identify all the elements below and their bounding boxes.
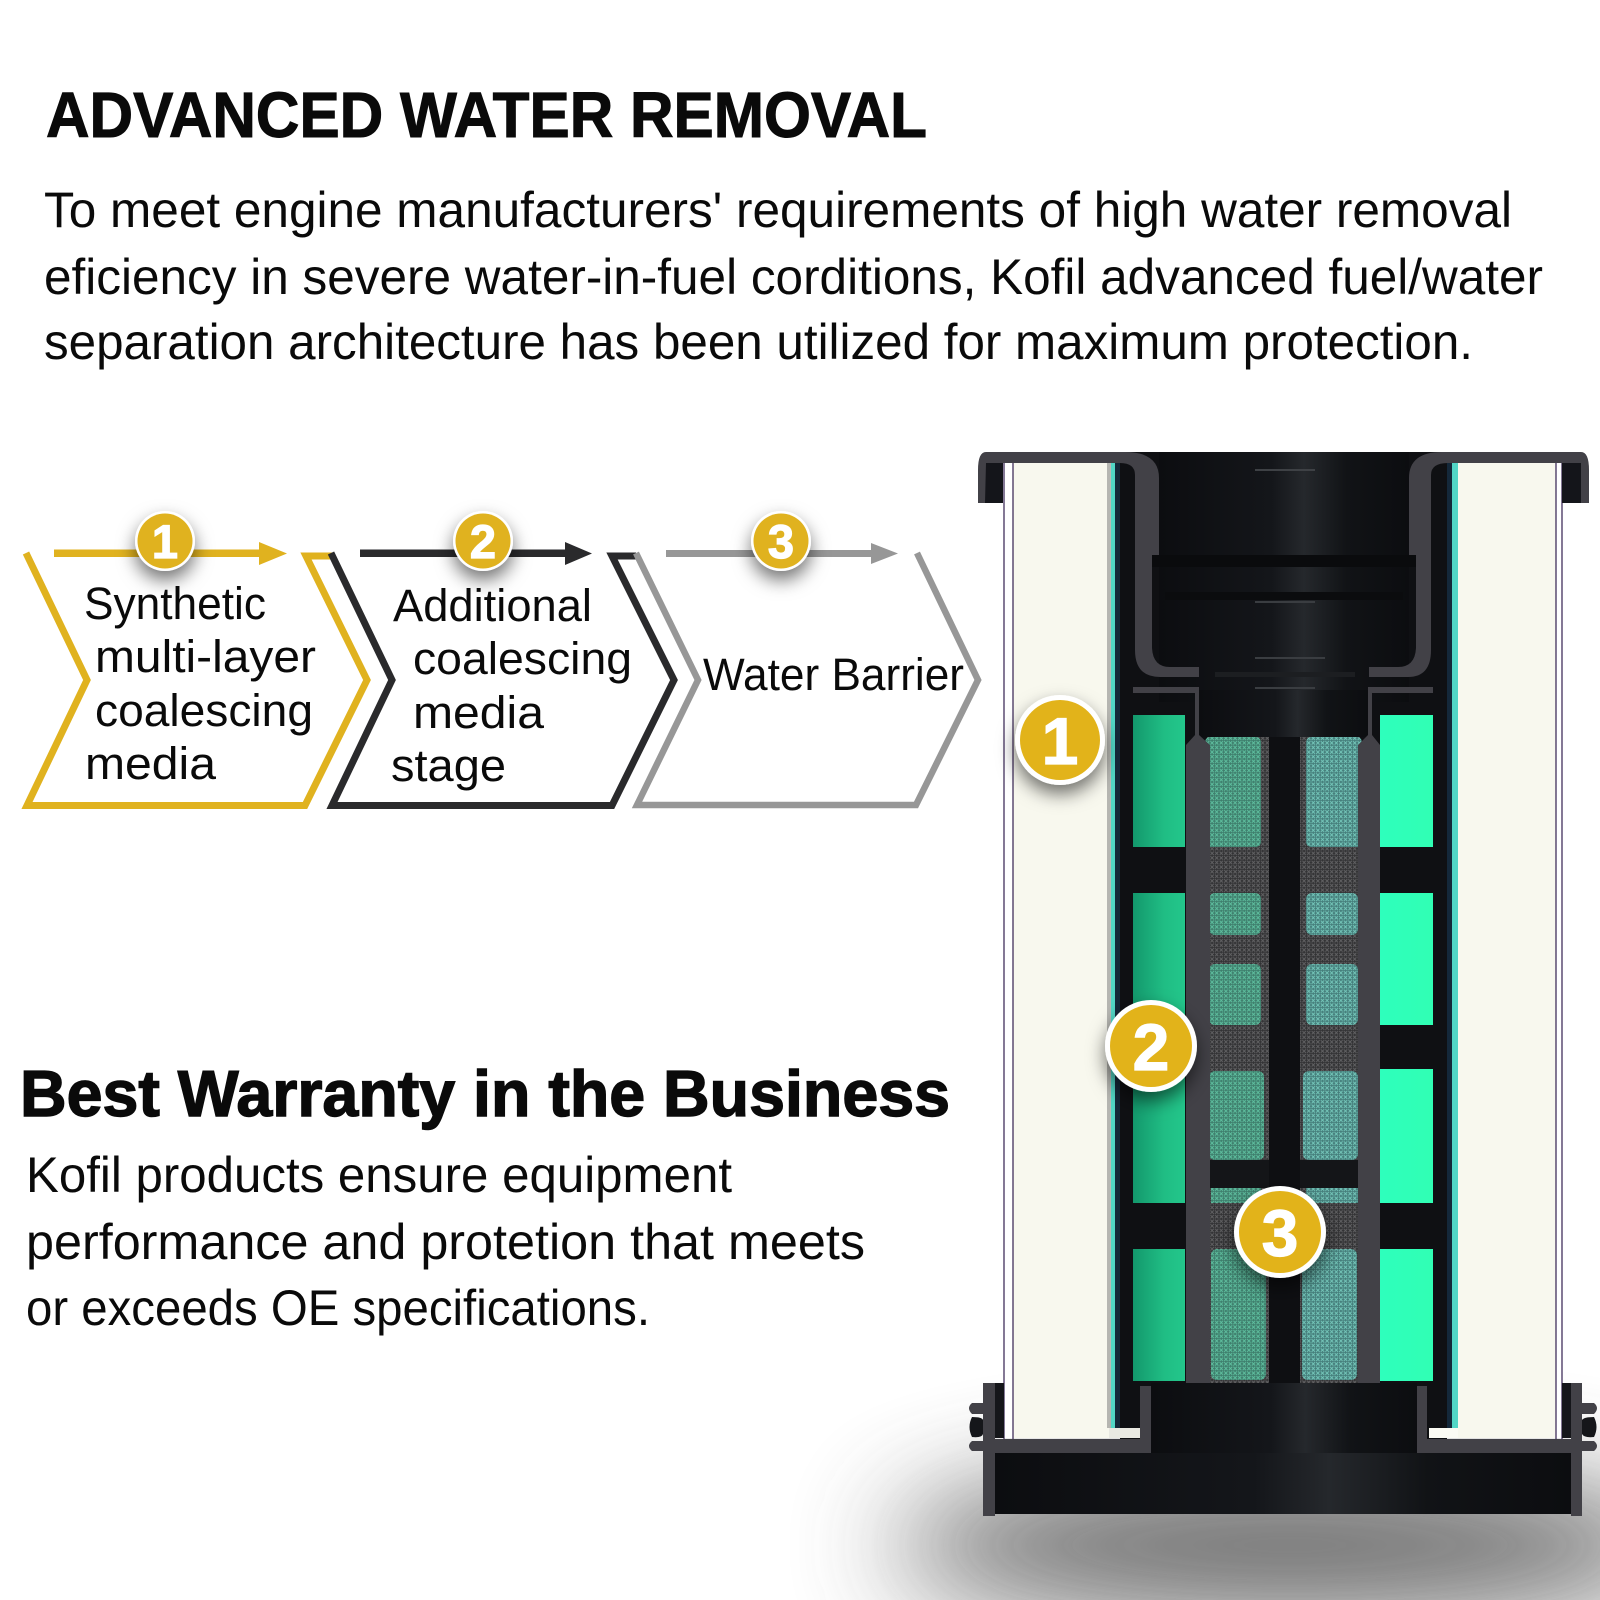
- intro paragraph: eficiency in severe water-in-fuel corditions, Kofil advanced fuel/water: [44, 249, 1543, 305]
- top cap flange left shade: [985, 463, 1003, 503]
- warranty paragraph: [26, 1147, 865, 1336]
- step 1 chevron: synthetic media: [26, 511, 367, 806]
- intro paragraph: To meet engine manufacturers' requirements of high water removal: [44, 182, 1512, 238]
- dark bands over mesh: [1207, 1160, 1360, 1407]
- badge 1 on filter: 1: [1042, 704, 1078, 778]
- step 1 chevron: synthetic media: media: [85, 738, 217, 789]
- badge 2 on filter: 2: [1133, 1010, 1169, 1084]
- outer paper media left: [1004, 463, 1110, 1440]
- base housing left: [969, 1383, 1151, 1516]
- step 2 chevron: additional media: Additional: [393, 580, 592, 631]
- step 2 chevron: additional media: media: [413, 687, 545, 738]
- step 2 chevron: additional media: stage: [391, 740, 506, 791]
- inner black body: [1120, 452, 1447, 1452]
- teal wrap strips: [1107, 463, 1458, 1428]
- step 1 chevron: synthetic media: multi-layer: [95, 631, 316, 682]
- floor shadow: [890, 1475, 1600, 1600]
- central tube wall: [1133, 687, 1433, 1420]
- step 3 chevron: water barrier: Water Barrier: [703, 649, 964, 700]
- green media left: [1133, 715, 1185, 1381]
- step 3 chevron: water barrier: [636, 511, 978, 805]
- bottom white gaps: [1109, 1428, 1458, 1438]
- step 1 chevron: synthetic media: coalescing: [95, 685, 313, 736]
- warranty paragraph: or exceeds OE specifications.: [26, 1280, 650, 1336]
- top cap right: [1369, 452, 1589, 677]
- step 1 chevron: synthetic media: Synthetic: [84, 578, 266, 629]
- water barrier mesh left: [1205, 737, 1266, 1380]
- step 2 chevron: additional media: [331, 511, 674, 806]
- warranty paragraph: performance and protetion that meets: [26, 1214, 865, 1270]
- base block: [995, 1383, 1571, 1514]
- badge 1 on filter: [1015, 695, 1105, 785]
- step 3 chevron: water barrier: 3: [768, 515, 794, 568]
- step 2 chevron: additional media: coalescing: [413, 633, 632, 684]
- intro paragraph: separation architecture has been utilized for maximum protection.: [44, 314, 1473, 370]
- lower cup shading: [1199, 690, 1369, 737]
- top bore: [1152, 452, 1416, 716]
- outer paper media right: [1458, 463, 1562, 1440]
- top cap flange right shade: [1562, 463, 1581, 503]
- title: ADVANCED WATER REMOVAL: [46, 79, 927, 151]
- warranty heading: Best Warranty in the Business: [20, 1057, 950, 1130]
- base housing right: [1417, 1383, 1597, 1516]
- warranty paragraph: Kofil products ensure equipment: [26, 1147, 732, 1203]
- center rod: [1269, 737, 1300, 1407]
- gray mesh bands: [1207, 737, 1360, 1387]
- filter cross-section: [969, 452, 1597, 1516]
- base housing left shade: [970, 1383, 1004, 1438]
- badge 2 on filter: [1105, 1000, 1197, 1092]
- water barrier mesh right: [1302, 737, 1362, 1380]
- base housing right shade: [1562, 1383, 1596, 1438]
- badge 3 on filter: 3: [1262, 1196, 1298, 1270]
- green media right: [1380, 715, 1433, 1381]
- intro paragraph: [44, 182, 1543, 370]
- badge 3 on filter: [1234, 1186, 1326, 1278]
- top cap: [978, 452, 1199, 677]
- step 2 chevron: additional media: 2: [470, 515, 496, 568]
- step 1 chevron: synthetic media: 1: [152, 515, 178, 568]
